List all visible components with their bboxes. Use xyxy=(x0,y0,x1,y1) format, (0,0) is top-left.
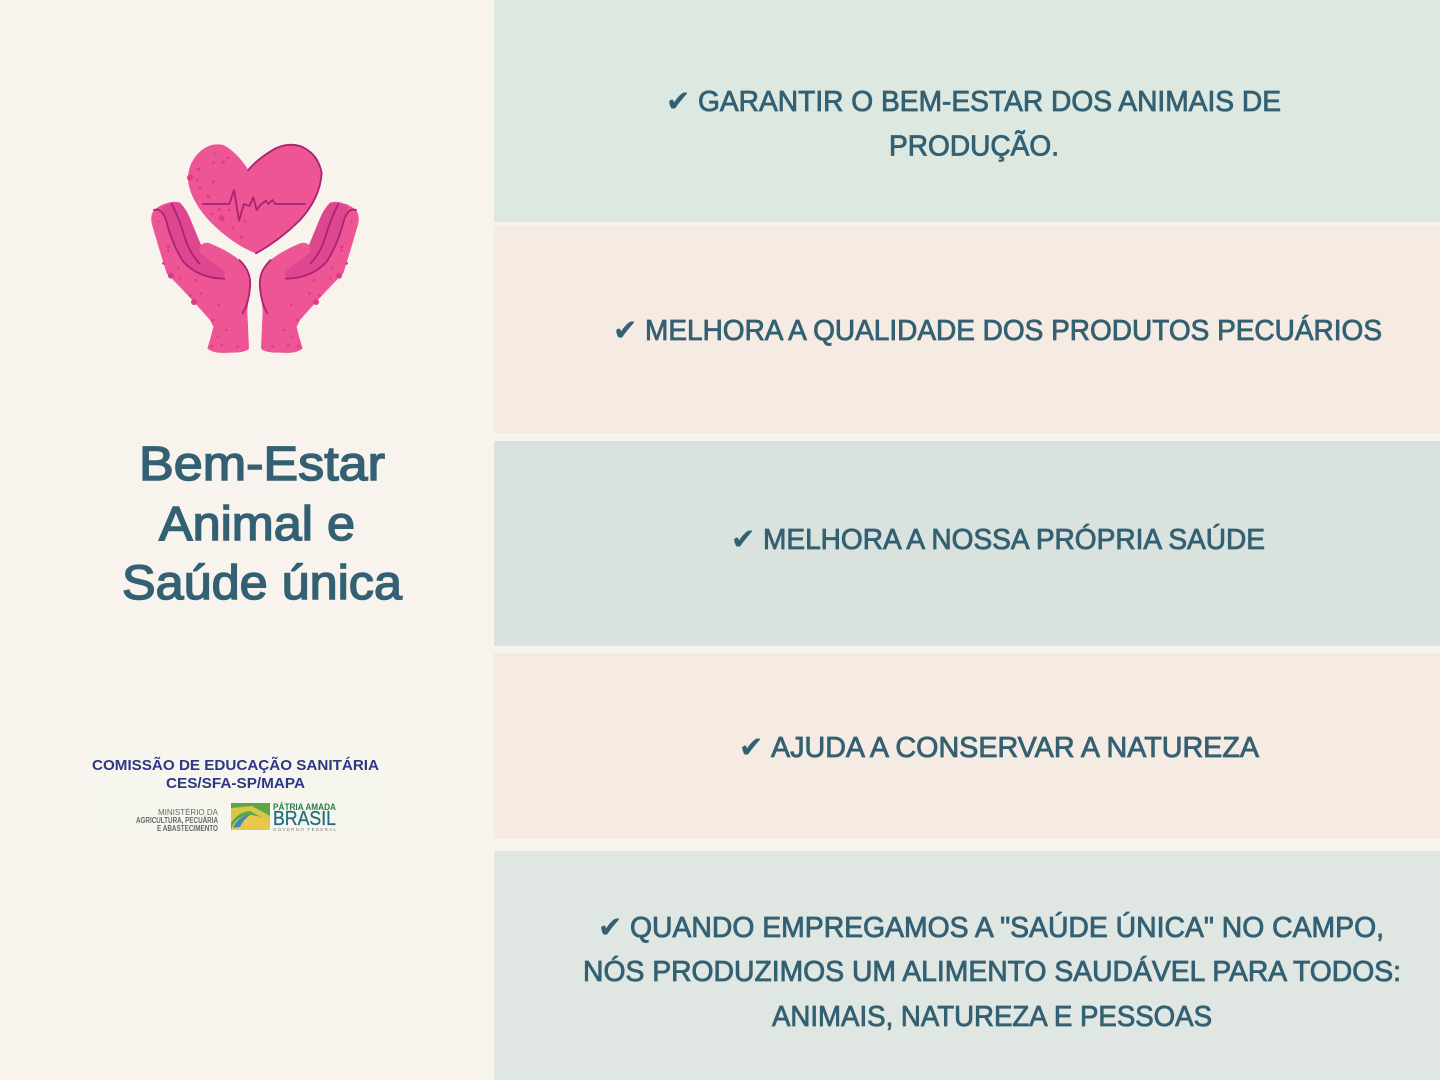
icon: brasil flag mark xyxy=(231,803,270,830)
brasil wordmark: BRASIL xyxy=(273,808,336,830)
brasil wordmark: GOVERNO FEDERAL xyxy=(273,827,336,832)
panel: nossa saúde xyxy=(494,441,1440,646)
logo heading line 2: CES/SFA-SP/MAPA xyxy=(166,775,305,792)
text: garantir line 2: PRODUÇÃO. xyxy=(889,128,1059,162)
logo heading line 1: COMISSÃO DE EDUCAÇÃO SANITÁRIA xyxy=(92,756,379,774)
panel: qualidade dos produtos xyxy=(494,226,1440,433)
ministry text: AGRICULTURA, PECUÁRIA xyxy=(136,816,218,825)
text: garantir line 1: GARANTIR O BEM-ESTAR DOS ANIMAIS DE xyxy=(698,86,1281,118)
title xyxy=(122,438,402,610)
title: Saúde única xyxy=(122,557,402,610)
text: ajuda a conservar: AJUDA A CONSERVAR A NATUREZA xyxy=(771,732,1260,764)
panel: conservar a natureza xyxy=(494,653,1440,839)
title: Animal e xyxy=(159,498,355,551)
icon: check mark: ✔ xyxy=(739,730,763,764)
icon: check mark: ✔ xyxy=(613,313,637,347)
ministry text xyxy=(136,808,219,833)
text: melhora a qualidade: MELHORA A QUALIDADE DOS PRODUTOS PECUÁRIOS xyxy=(645,314,1382,347)
ministry text: MINISTÉRIO DA xyxy=(158,808,219,817)
panel: garantir o bem-estar xyxy=(494,0,1440,222)
brasil wordmark: PÁTRIA AMADA xyxy=(273,802,336,812)
ministry text: E ABASTECIMENTO xyxy=(157,824,218,833)
text: saúde única line 1: QUANDO EMPREGAMOS A "SAÚDE ÚNICA" NO CAMPO, xyxy=(630,911,1384,944)
panel: saúde única no campo xyxy=(494,851,1440,1080)
icon: check mark: ✔ xyxy=(666,84,690,118)
logo block: comissão de educação sanitária xyxy=(88,752,388,838)
icon: check mark: ✔ xyxy=(598,910,622,944)
icon: check mark: ✔ xyxy=(731,522,755,556)
text: saúde única line 3: ANIMAIS, NATUREZA E PESSOAS xyxy=(772,1001,1212,1033)
text: melhora a nossa saúde: MELHORA A NOSSA PRÓPRIA SAÚDE xyxy=(763,523,1265,556)
brasil wordmark xyxy=(273,802,336,832)
text: saúde única line 2: NÓS PRODUZIMOS UM ALIMENTO SAUDÁVEL PARA TODOS: xyxy=(583,955,1401,988)
icon: heart held by two hands xyxy=(151,144,359,353)
title: Bem-Estar xyxy=(139,438,385,491)
